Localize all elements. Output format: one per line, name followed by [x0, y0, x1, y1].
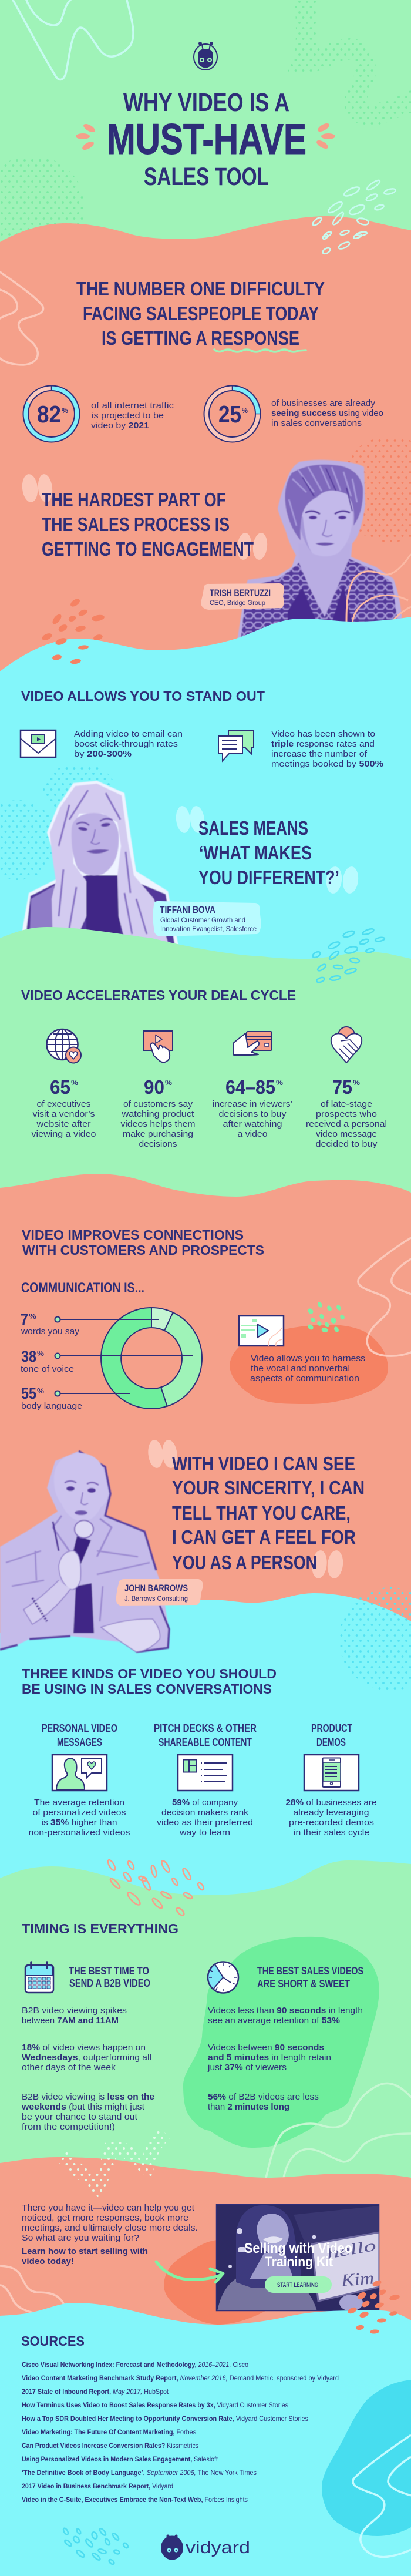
heading: connections [22, 1227, 264, 1258]
text: triple response [271, 729, 383, 769]
name card: Tiffani Bova: Global Customer Growth and [160, 916, 245, 924]
quote: John Barrows [172, 1453, 365, 1573]
salmon oval cluster [41, 597, 105, 665]
quotation marks: Trish [21, 473, 268, 560]
icon: calendar [25, 1962, 53, 1993]
decorative squiggles lower right [266, 2083, 411, 2178]
white dotted ribbon [59, 2128, 169, 2197]
accent dashes around must-have [76, 122, 335, 152]
panel: difficulty section [0, 179, 411, 705]
text: personal video stat [28, 1798, 130, 1838]
text: best time details: be your chance to stand out [22, 2112, 138, 2122]
quote: Tiffani Bova: YOU DIFFERENT?’ [198, 866, 339, 888]
list: sources: How a Top SDR Doubled Her Meeting to Opportunity Conversion Rate, Vidyard Customer Stories [22, 2414, 308, 2423]
logo: vidyard mascot [194, 42, 217, 70]
panel: accelerate section [0, 901, 411, 1234]
heading: number one difficulty: FACING SALESPEOPLE TODAY [83, 303, 319, 324]
callout: vocal and nonverbal [250, 1354, 365, 1383]
salmon oval cluster [347, 2279, 400, 2334]
outlined ovals [107, 1859, 205, 1916]
quote: John Barrows: WITH VIDEO I CAN SEE [172, 1453, 355, 1475]
text: 75 percent [306, 1076, 387, 1149]
text: 64-85 percent: after watching [223, 1119, 282, 1129]
stat: 82 percent: video by 2021 [91, 421, 149, 431]
callout: vocal and nonverbal: Video allows you to harness [251, 1354, 365, 1363]
name card: Trish Bertuzzi: TRISH BERTUZZI [210, 587, 271, 599]
text: best time details: B2B video viewing is less on the [22, 2092, 154, 2102]
legend: 38 percent: % [37, 1349, 44, 1358]
heading: connections: VIDEO IMPROVES CONNECTIONS [22, 1227, 244, 1242]
quote: Trish Bertuzzi: GETTING TO ENGAGEMENT [42, 538, 254, 560]
icon: globe with heart [47, 1029, 81, 1063]
text: 90 percent [121, 1076, 195, 1149]
subheading: personal video messages: MESSAGES [57, 1737, 102, 1748]
decorative squiggle left [0, 2266, 64, 2313]
title: SALES TOOL [144, 163, 269, 191]
text: conclusion [22, 2203, 198, 2266]
portrait: John Barrows [0, 1451, 169, 1652]
portrait: Tiffani Bova [21, 781, 178, 946]
name card: Tiffani Bova: TIFFANI BOVA [160, 904, 215, 915]
legend: 7 percent: % [29, 1312, 36, 1321]
dotted ribbon top right [288, 1, 411, 125]
text: short and sweet details [207, 2006, 363, 2112]
text: pitch deck stat: 59% of company [172, 1798, 238, 1808]
list: sources: ‘The Definitive Book of Body Language’, September 2006, The New York Times [22, 2468, 257, 2477]
text: 90 percent: watching product [121, 1109, 194, 1119]
text: product demo stat: pre-recorded demos [289, 1818, 374, 1828]
button: start learning: START LEARNING [277, 2282, 318, 2289]
icon: clock [208, 1962, 238, 1993]
outlined ovals [62, 2527, 129, 2565]
heading: three kinds: THREE KINDS OF VIDEO YOU SHOULD [22, 1666, 277, 1681]
text: 65 percent: % [71, 1079, 78, 1087]
blob lower right [322, 2380, 411, 2536]
text: pitch deck stat: decision makers rank [161, 1808, 249, 1818]
list: sources: Cisco Visual Networking Index: Forecast and Methodology, 2016–2021, Cisco [22, 2360, 248, 2369]
subheading: best time: SEND A B2B VIDEO [69, 1977, 150, 1989]
name card: John Barrows: JOHN BARROWS [124, 1583, 188, 1594]
text: triple response: Video has been shown to [271, 729, 375, 739]
subheading: best time [69, 1965, 150, 1989]
icon: chat bubbles [218, 731, 254, 761]
text: pitch deck stat: way to learn [179, 1828, 230, 1838]
text: 64-85 percent [213, 1076, 292, 1139]
subheading: best time: THE BEST TIME TO [69, 1965, 149, 1977]
image card: training kit: Kim [340, 2268, 375, 2290]
text: short and sweet details: Videos between 90 seconds [208, 2043, 324, 2053]
text: 65 percent: of executives [36, 1099, 90, 1109]
arrow to image card [156, 2262, 223, 2282]
subheading: product demos: DEMOS [316, 1737, 346, 1748]
decorative squiggle right [358, 1238, 411, 1356]
panel: sources [0, 2279, 411, 2576]
mint oval cluster [307, 1301, 345, 1333]
text: 64-85 percent: decisions to buy [218, 1109, 287, 1119]
text: 64-85 percent: 64–85 [225, 1076, 275, 1098]
icon: personal message [52, 1755, 107, 1791]
blob behind right column [183, 1937, 379, 2148]
text: 90 percent: decisions [139, 1139, 177, 1149]
text: email click-through: boost click-through rates [74, 739, 178, 749]
subheading: product demos: PRODUCT [311, 1722, 352, 1734]
image card: training kit: Selling with Video [244, 2241, 352, 2256]
logo: vidyard wordmark [161, 2534, 250, 2559]
text: email click-through: Adding video to email can [74, 729, 183, 739]
quote: Tiffani Bova [198, 817, 339, 888]
text: 64-85 percent: increase in viewers’ [213, 1099, 292, 1109]
list: sources: Can Product Videos Increase Conversion Rates? Kissmetrics [22, 2441, 198, 2450]
quote: Trish Bertuzzi [42, 489, 254, 560]
quotation marks: John [147, 1439, 344, 1579]
list: sources: How Terminus Uses Video to Boost Sales Response Rates by 3x, Vidyard Customer Stories [22, 2401, 288, 2409]
donut chart [55, 1308, 202, 1409]
logo: vidyard wordmark: vidyard [186, 2538, 250, 2557]
text: triple response: meetings booked by 500% [271, 759, 383, 769]
name card: John Barrows [116, 1579, 203, 1606]
text: email click-through: by 200-300% [74, 749, 132, 759]
stat: 82 percent: % [62, 406, 68, 415]
text: triple response: triple response rates and [271, 739, 375, 749]
text: 75 percent: 75 [332, 1076, 352, 1098]
text: 75 percent: received a personal [306, 1119, 387, 1129]
quote: John Barrows: YOUR SINCERITY, I CAN [172, 1477, 365, 1499]
blob behind image [164, 2240, 305, 2325]
quote: Trish Bertuzzi: THE SALES PROCESS IS [42, 513, 230, 535]
text: 75 percent: prospects who [316, 1109, 377, 1119]
text: short and sweet details: than 2 minutes long [208, 2102, 289, 2112]
dotted circle behind portrait [348, 439, 411, 542]
text: best time details: weekends (but this might just [21, 2102, 145, 2112]
heading: three kinds [22, 1666, 277, 1697]
name card: Trish Bertuzzi [201, 583, 284, 610]
quote: Tiffani Bova: ‘WHAT MAKES [199, 842, 312, 864]
icon: hand holding card [234, 1032, 272, 1055]
text: best time details: other days of the week [22, 2063, 116, 2073]
text: conclusion: So what are you waiting for? [22, 2233, 139, 2243]
icon: handshake heart [331, 1027, 362, 1063]
legend: 7 percent: 7 [21, 1311, 28, 1328]
stat: 25 percent: in sales conversations [271, 418, 362, 428]
text: short and sweet details: 56% of B2B videos are less [208, 2092, 319, 2102]
text: product demo stat: already leveraging [294, 1808, 369, 1818]
subheading: product demos [311, 1722, 352, 1748]
text: short and sweet details: Videos less than 90 seconds in length [208, 2006, 363, 2016]
dotted circle right [341, 1587, 411, 1690]
quote: John Barrows: YOU AS A PERSON [172, 1551, 317, 1573]
text: personal video stat: is 35% higher than [41, 1818, 117, 1828]
text: 90 percent: 90 [144, 1076, 164, 1098]
legend: 55 percent: % [37, 1386, 44, 1395]
text: 65 percent: 65 [50, 1076, 70, 1098]
legend: 38 percent: tone of voice [21, 1364, 74, 1374]
portrait: Trish Bertuzzi [237, 460, 402, 640]
list: sources: Using Personalized Videos in Modern Sales Engagement, Salesloft [22, 2455, 218, 2463]
text: pitch deck stat: video as their preferred [157, 1818, 253, 1828]
title [107, 88, 306, 191]
callout: vocal and nonverbal: the vocal and nonverbal [251, 1363, 350, 1373]
outlined ovals [312, 179, 396, 255]
subheading: pitch decks [154, 1722, 257, 1748]
text: 75 percent: decided to buy [316, 1139, 378, 1149]
text: 65 percent [32, 1076, 96, 1139]
subheading: short and sweet: ARE SHORT & SWEET [257, 1978, 350, 1990]
list: sources: Video Content Marketing Benchmark Study Report, November 2016, Demand Metric, sponsored by Vidyard [22, 2374, 339, 2382]
panel: three kinds of video [0, 1451, 411, 1939]
heading: three kinds: BE USING IN SALES CONVERSATIONS [22, 1681, 272, 1697]
text: 90 percent: make purchasing [123, 1129, 193, 1139]
icon: video email [21, 730, 56, 757]
text: short and sweet details: just 37% of viewers [207, 2063, 287, 2073]
text: 65 percent: website after [36, 1119, 90, 1129]
text: best time details: 18% of video views happen on [22, 2043, 146, 2053]
text: best time details: B2B video viewing spikes [22, 2006, 127, 2016]
list: sources [22, 2360, 339, 2504]
dotted circle left [0, 156, 88, 244]
icon: video frame [239, 1316, 284, 1346]
subheading: personal video messages [42, 1722, 117, 1748]
legend: 55 percent: body language [21, 1401, 82, 1411]
heading: deal cycle: VIDEO ACCELERATES YOUR DEAL CYCLE [21, 988, 296, 1003]
list: sources: Video in the C-Suite, Executives Embrace the Non-Text Web, Forbes Insights [22, 2496, 248, 2504]
text: triple response: increase the number of [271, 749, 368, 759]
text: personal video stat: The average retention [34, 1798, 124, 1808]
decorative squiggle lower right [353, 2435, 411, 2557]
name card: Tiffani Bova [153, 901, 261, 936]
stat: 82 percent: 82 [37, 401, 61, 428]
decorative lines over portrait [346, 554, 411, 623]
icon: product demo phone [304, 1755, 359, 1791]
quote: John Barrows: I CAN GET A FEEL FOR [172, 1526, 356, 1548]
list: sources: Video Marketing: The Future Of Content Marketing, Forbes [22, 2428, 196, 2436]
legend: 38 percent [21, 1348, 74, 1374]
text: short and sweet details: see an average retention of 53% [208, 2016, 340, 2026]
heading: number one difficulty: THE NUMBER ONE DIFFICULTY [76, 278, 325, 300]
decorative squiggle left [0, 272, 43, 365]
text: best time details: from the competition!) [22, 2122, 115, 2132]
subheading: short and sweet [257, 1965, 363, 1990]
heading: number one difficulty: IS GETTING A RESPONSE [102, 327, 299, 349]
text: 90 percent: % [165, 1079, 172, 1087]
text: best time details: between 7AM and 11AM [22, 2016, 119, 2026]
list: sources: 2017 Video in Business Benchmark Report, Vidyard [22, 2482, 173, 2490]
title: MUST-HAVE [107, 116, 306, 163]
subheading: short and sweet: THE BEST SALES VIDEOS [257, 1965, 363, 1977]
text: product demo stat [285, 1798, 377, 1838]
icon: pitch deck [178, 1755, 233, 1791]
panel: timing section [0, 1859, 411, 2232]
quotation marks: Tiffani [175, 805, 359, 894]
text: pitch deck stat [157, 1798, 253, 1838]
subheading: personal video messages: PERSONAL VIDEO [42, 1722, 117, 1734]
name card: Trish Bertuzzi: CEO, Bridge Group [210, 599, 265, 607]
panel: call to action [0, 2128, 411, 2325]
text: best time details [21, 2006, 154, 2132]
blob behind callout [230, 1325, 388, 1404]
text: 75 percent: of late-stage [321, 1099, 372, 1109]
stat: 25 percent: of businesses are already [271, 398, 376, 408]
name card: John Barrows: J. Barrows Consulting [124, 1594, 188, 1603]
stat: 25 percent: % [242, 406, 248, 415]
icon: video with pointing hand [144, 1031, 173, 1062]
subheading: pitch decks: PITCH DECKS & OTHER [154, 1722, 257, 1734]
text: product demo stat: 28% of businesses are [285, 1798, 377, 1808]
legend: 7 percent [21, 1311, 80, 1336]
subheading: pitch decks: SHAREABLE CONTENT [159, 1737, 252, 1748]
name card: Tiffani Bova: Innovation Evangelist, Salesforce [160, 925, 257, 933]
button: start learning [265, 2276, 332, 2293]
image card: training kit [216, 2204, 379, 2311]
heading: timing: TIMING IS EVERYTHING [22, 1921, 178, 1936]
dotted blobs behind portrait [0, 764, 117, 881]
heading: number one difficulty [76, 278, 325, 352]
quote: Trish Bertuzzi: THE HARDEST PART OF [42, 489, 226, 511]
legend: 38 percent: 38 [21, 1348, 36, 1365]
heading: stand out: VIDEO ALLOWS YOU TO STAND OUT [21, 688, 265, 704]
outlined ovals [312, 928, 385, 983]
text: 75 percent: % [353, 1079, 360, 1087]
image card: training kit: Training Kit [265, 2254, 333, 2270]
text: conclusion: meetings, and ultimately close more deals. [22, 2223, 198, 2233]
text: personal video stat: non-personalized videos [28, 1828, 130, 1838]
text: best time details: Wednesdays , outperforming all [22, 2053, 151, 2063]
text: conclusion: There you have it—video can help you get [22, 2203, 195, 2213]
text: conclusion: video today! [22, 2256, 74, 2266]
text: 64-85 percent: % [276, 1079, 283, 1087]
text: product demo stat: in their sales cycle [294, 1828, 369, 1838]
title: WHY VIDEO IS A [123, 88, 289, 117]
image card: training kit: hello [325, 2237, 378, 2262]
stat: 25 percent [204, 385, 383, 442]
legend: 55 percent: 55 [21, 1385, 36, 1402]
heading: sources: SOURCES [21, 2333, 85, 2349]
stat: 25 percent: seeing success using video [271, 408, 383, 418]
text: 90 percent: videos helps them [121, 1119, 195, 1129]
text: 75 percent: video message [316, 1129, 377, 1139]
stat: 82 percent: is projected to be [92, 411, 164, 421]
legend: 7 percent: words you say [21, 1326, 80, 1336]
subheading: communication: COMMUNICATION IS... [21, 1280, 144, 1296]
text: 65 percent: visit a vendor’s [33, 1109, 95, 1119]
legend: 55 percent [21, 1385, 82, 1411]
quote: Tiffani Bova: SALES MEANS [198, 817, 308, 839]
panel: stand out section [0, 599, 411, 959]
heading: connections: WITH CUSTOMERS AND PROSPECTS [22, 1242, 264, 1258]
panel: hero header [1, 0, 411, 240]
text: 64-85 percent: a video [237, 1129, 268, 1139]
list: sources: 2017 State of Inbound Report, May 2017, HubSpot [22, 2387, 169, 2396]
text: 65 percent: viewing a video [32, 1129, 96, 1139]
text: 90 percent: of customers say [123, 1099, 193, 1109]
stat: 25 percent: 25 [218, 401, 241, 428]
text: personal video stat: of personalized videos [33, 1808, 126, 1818]
text: short and sweet details: and 5 minutes in length retain [208, 2053, 331, 2063]
decorative squiggle top left [13, 0, 133, 79]
text: conclusion: noticed, get more responses, book more [22, 2213, 188, 2223]
stat: 82 percent [23, 385, 174, 442]
panel: connections section [0, 1174, 411, 1704]
text: conclusion: Learn how to start selling with [22, 2246, 148, 2256]
stat: 82 percent: of all internet traffic [91, 401, 174, 411]
text: email click-through [74, 729, 183, 759]
callout: vocal and nonverbal: aspects of communication [250, 1373, 359, 1383]
quote: John Barrows: TELL THAT YOU CARE, [172, 1502, 351, 1524]
